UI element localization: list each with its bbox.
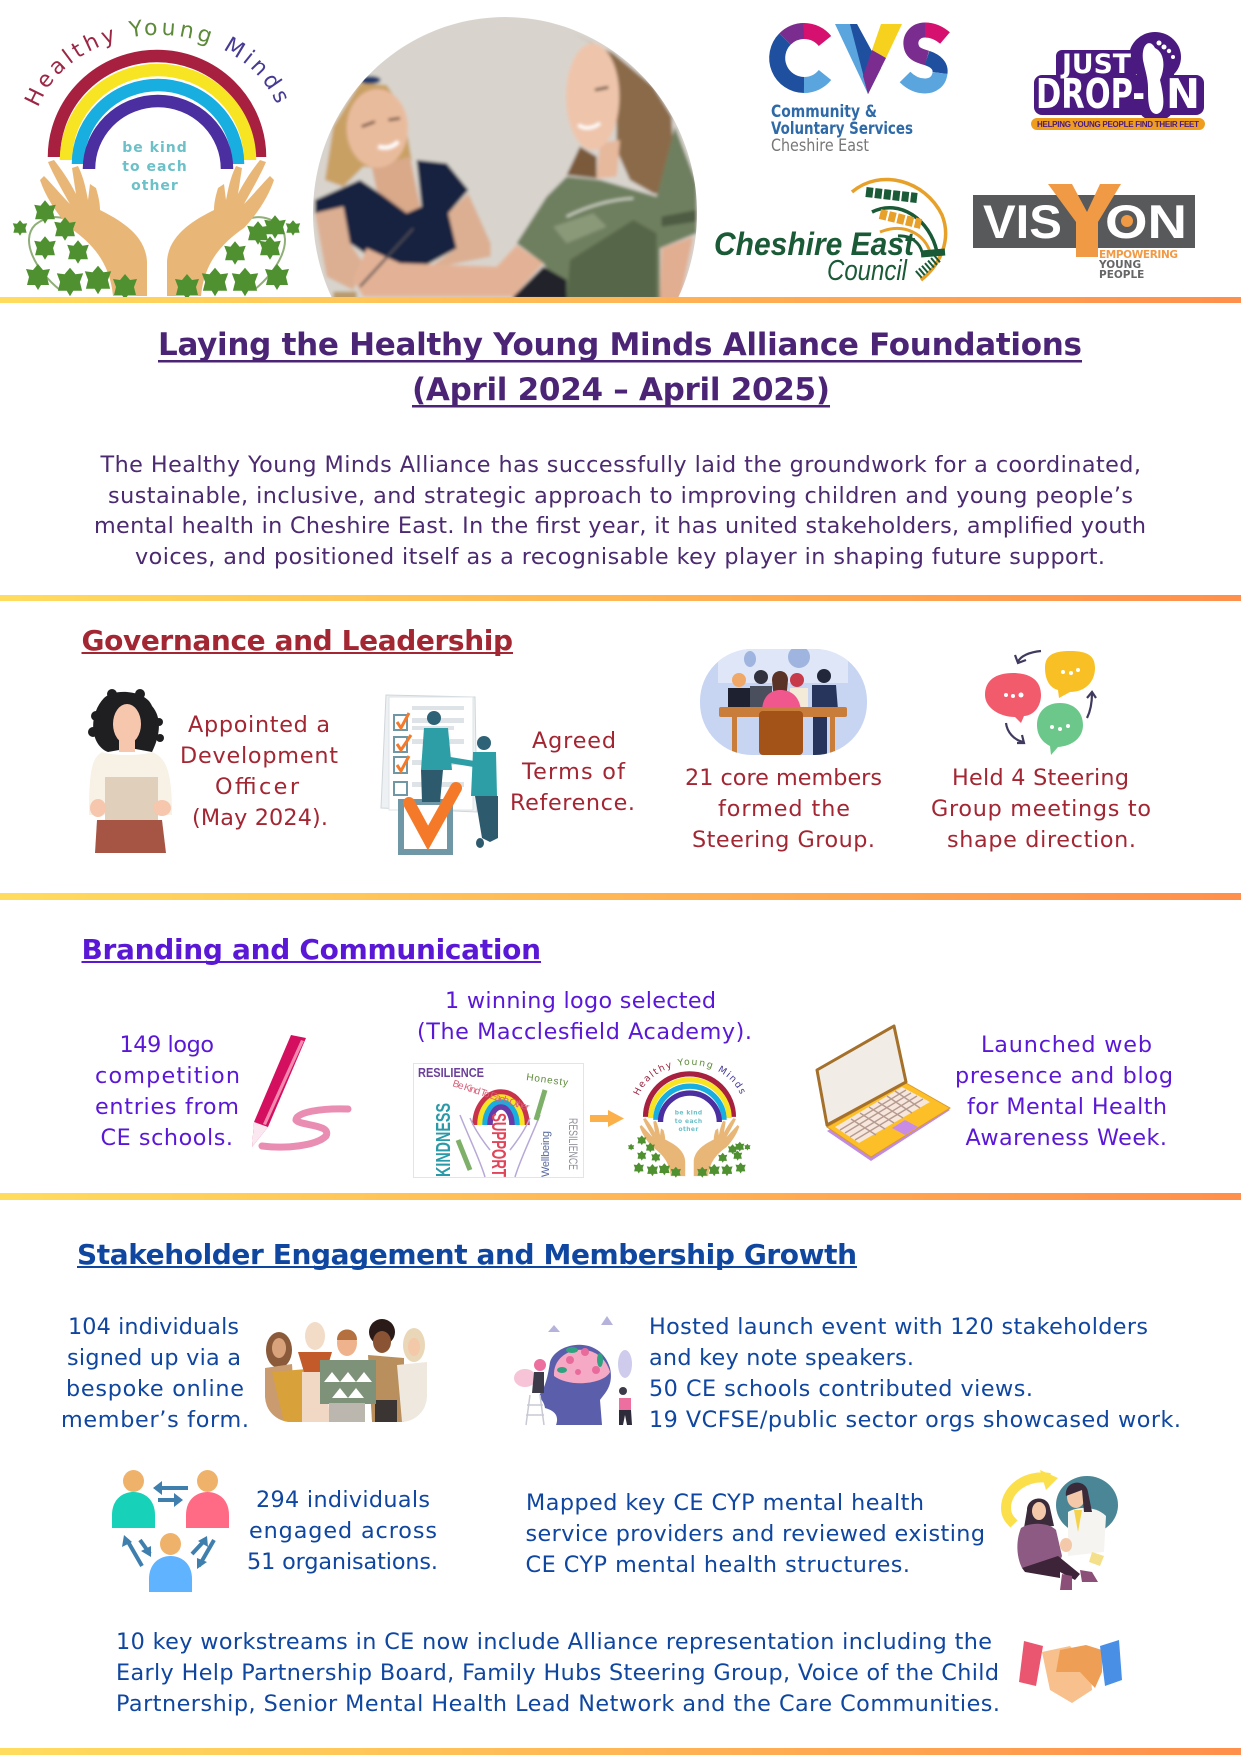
title: Laying the Healthy Young Minds Alliance Foundations [158,327,1082,363]
intro paragraph: sustainable, inclusive, and strategic approach to improving children and young people’s [108,483,1133,509]
council word: Council [827,255,908,287]
vision strapline: EMPOWERING [1099,249,1178,261]
icon: woman with tablet [88,689,172,853]
logo: Cheshire East Council [714,179,946,287]
icon: steering group meeting [700,646,867,755]
icon: pencil with squiggle [252,1035,348,1147]
icon: checklist and handshake [381,695,498,852]
logo: Healthy Young Minds [12,20,300,297]
text: launch event: Hosted launch event with 120 stakeholders [649,1314,1148,1340]
strapline [1031,118,1205,130]
icon: three connected people [112,1470,229,1592]
text: development officer: Officer [215,774,300,800]
just drop-in words: N [1166,70,1200,118]
school logo entry drawing: Wellbeing [540,1131,552,1177]
just drop-in words: DROP- [1036,70,1145,118]
vision strapline: YOUNG [1098,259,1141,271]
logo rainbow [54,56,260,169]
final logo hands [640,1118,739,1176]
icon: handshake [1019,1640,1122,1703]
text: online sign ups [61,1314,249,1433]
intro paragraph: The Healthy Young Minds Alliance has successfully laid the groundwork for a coordinated, [100,452,1141,478]
text: development officer: Appointed a [188,712,330,738]
text: mapped providers: Mapped key CE CYP mental health [526,1490,924,1516]
council name: Cheshire East [714,226,915,262]
just drop-in words: JUST [1060,49,1132,80]
text: logo entries: CE schools. [100,1125,233,1151]
text: winning logo: 1 winning logo selected [445,988,716,1014]
CVS name [771,102,913,156]
text: individuals engaged: 51 organisations. [247,1549,438,1575]
text: steering group members: formed the [718,796,850,822]
final logo caption: to each [675,1118,703,1125]
woman [315,76,491,300]
photo wall [313,17,697,297]
pen [360,228,413,287]
text: launch event [649,1314,1181,1433]
logo ring text: Healthy Young Minds [24,20,286,106]
text: individuals engaged: 294 individuals [256,1487,430,1513]
text: launch event: and key note speakers. [649,1345,914,1371]
big Y [1048,184,1121,257]
heading: governance: Governance and Leadership [82,624,513,657]
intro paragraph [94,452,1146,570]
text: development officer [180,712,338,831]
toes [1156,40,1175,59]
text: online sign ups: bespoke online [66,1376,244,1402]
final logo caption: be kind [675,1110,703,1117]
CVS name: Community & [771,102,877,122]
arrow: entry to final logo [590,1110,624,1127]
final logo [628,1058,750,1178]
grey plate [973,195,1195,248]
text: workstreams: Partnership, Senior Mental Health Lead Network and the Care Communities. [116,1691,1000,1717]
text: development officer: Development [180,743,338,769]
logo ivy vines [29,217,285,290]
logo caption: to each [122,159,188,175]
logo ivy leaves [13,200,300,300]
text: logo entries [95,1032,240,1151]
divider bar 1 [0,297,1241,303]
text: logo entries: competition [95,1063,240,1089]
text: logo entries: 149 logo [120,1032,214,1058]
text: steering group members [685,765,882,853]
text: workstreams: Early Help Partnership Board, Family Hubs Steering Group, Voice of the Child [116,1660,999,1686]
text: steering group meetings: shape direction. [947,827,1136,853]
text: online sign ups: 104 individuals [68,1314,239,1340]
final logo caption [675,1110,703,1133]
heading: stakeholder: Stakeholder Engagement and Membership Growth [77,1238,857,1271]
VIS: VIS [983,195,1062,248]
text: development officer: (May 2024). [192,805,328,831]
logo hands [40,160,274,296]
icon: laptop [817,1026,950,1161]
text: individuals engaged [247,1487,438,1575]
text: terms of reference [510,728,635,816]
title [158,327,1082,408]
text: mapped providers: CE CYP mental health structures. [526,1552,910,1578]
text: steering group members: Steering Group. [692,827,875,853]
photo: woman and girl talking [313,17,697,297]
text: online sign ups: signed up via a [67,1345,241,1371]
final logo ring text: Healthy Young Minds [633,1058,745,1095]
text: logo entries: entries from [95,1094,239,1120]
icon: therapist and young person [1006,1470,1118,1590]
panel: branding and communication [82,933,1173,1178]
text: launch event: 50 CE schools contributed views. [649,1376,1033,1402]
logo caption: be kind [122,140,188,156]
school logo entry drawing: KINDNESS [433,1103,455,1177]
foot [1143,43,1163,114]
strapline text: HELPING YOUNG PEOPLE FIND THEIR FEET [1037,120,1199,129]
logo: Vision [973,184,1195,281]
icon: speech bubbles [985,651,1096,755]
school logo entry drawing [414,1064,584,1178]
text: steering group members: 21 core members [685,765,882,791]
intro paragraph: voices, and positioned itself as a recognisable key player in shaping future support. [135,544,1105,570]
logo caption [122,140,188,194]
panel: governance and leadership [82,624,1151,853]
text: terms of reference: Reference. [510,790,635,816]
school logo entry drawing: RESILIENCE [566,1118,580,1170]
text: terms of reference: Agreed [532,728,616,754]
intro paragraph: mental health in Cheshire East. In the first year, it has united stakeholders, amplified youth [94,513,1146,539]
text: mapped providers [526,1490,985,1578]
drawing leaves [458,1090,545,1170]
drawing words: RESILIENCE [418,1065,484,1080]
text: steering group meetings [931,765,1151,853]
text: web presence [955,1032,1173,1151]
logo: CVS [771,24,945,156]
final logo ivy [628,1135,750,1178]
final logo rainbow [646,1074,733,1122]
text: web presence: for Mental Health [967,1094,1167,1120]
CVS name: Cheshire East [771,136,869,156]
text: workstreams: 10 key workstreams in CE now include Alliance representation including the [116,1629,992,1655]
school logo entry drawing: SUPPORT [487,1113,509,1177]
text: steering group meetings: Held 4 Steering [952,765,1129,791]
text: web presence: Launched web [981,1032,1152,1058]
text: individuals engaged: engaged across [249,1518,437,1544]
title: (April 2024 – April 2025) [412,372,830,408]
divider bar 2 [0,595,1241,601]
logo caption: other [131,178,179,194]
vision strapline: PEOPLE [1099,269,1144,281]
text: online sign ups: member’s form. [61,1407,249,1433]
icon: diverse group of people [265,1319,427,1423]
text: winning logo [417,988,752,1045]
panel: stakeholder engagement [61,1238,1181,1717]
vision strapline [1098,249,1178,281]
logo: Just Drop-In [1031,32,1205,130]
drawing rainbow [475,1092,527,1125]
ON: ON [1105,195,1187,248]
wheat emblem [852,179,946,280]
drawing hands [460,1115,540,1177]
heading: branding: Branding and Communication [82,933,541,966]
school logo entry drawing: Be Kind To Each Other [451,1078,531,1114]
text: winning logo: (The Macclesfield Academy). [417,1019,752,1045]
divider bar 3 [0,893,1241,900]
final logo caption: other [678,1126,699,1133]
purple backing [1034,32,1204,120]
icon: brain and head [514,1316,632,1425]
divider bar 5 [0,1748,1241,1755]
text: web presence: presence and blog [955,1063,1173,1089]
O centre [1121,215,1133,227]
text: web presence: Awareness Week. [966,1125,1167,1151]
CVS name: Voluntary Services [771,119,913,139]
school logo entry drawing: Honesty [526,1072,569,1089]
text: mapped providers: service providers and reviewed existing [526,1521,985,1547]
girl [353,33,697,300]
text: launch event: 19 VCFSE/public sector orgs showcased work. [649,1407,1181,1433]
text: steering group meetings: Group meetings to [931,796,1151,822]
CVS letters [777,24,945,94]
text: workstreams [116,1629,1000,1717]
text: terms of reference: Terms of [521,759,626,785]
divider bar 4 [0,1193,1241,1200]
just drop-in words [1036,49,1200,118]
